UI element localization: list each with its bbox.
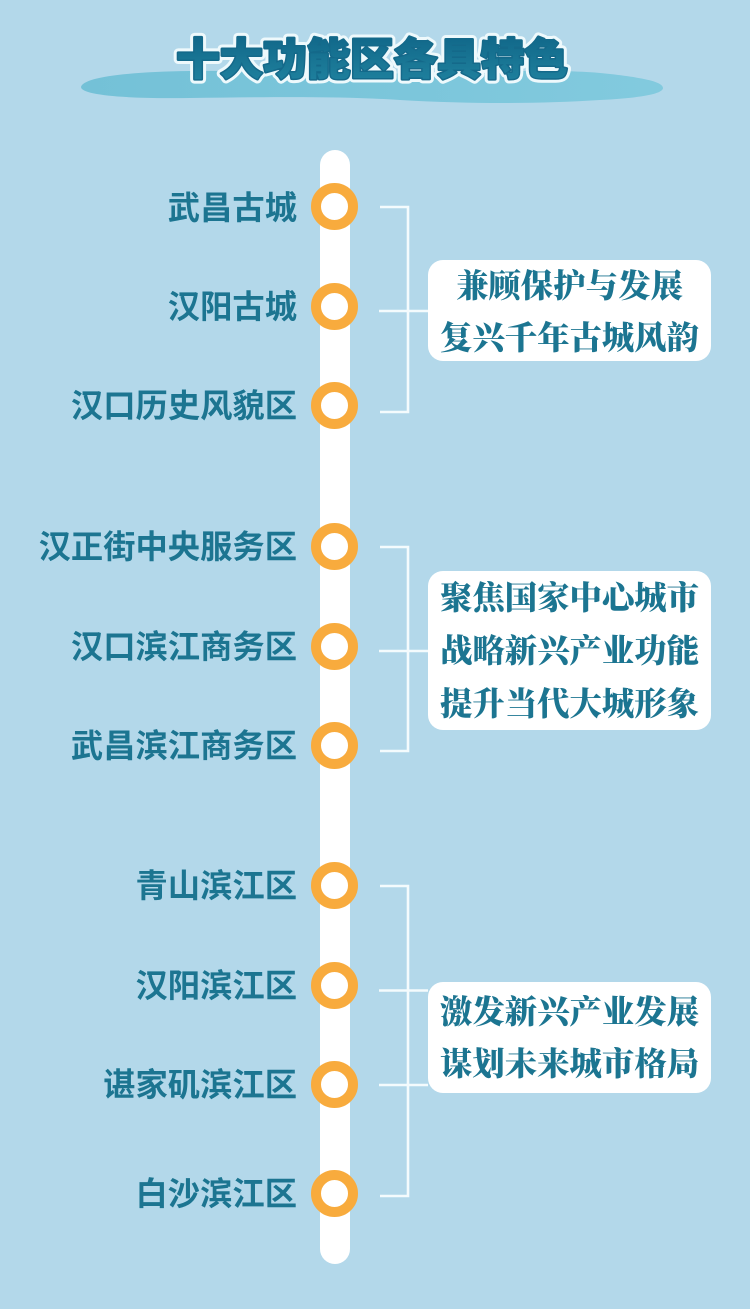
text line: 谋划未来城市格局 (440, 1047, 699, 1083)
label: 青山滨江区: 青山滨江区 (136, 868, 297, 904)
text line: 激发新兴产业发展 (440, 995, 699, 1031)
panel: riverside future (428, 982, 711, 1093)
label: 白沙滨江区: 白沙滨江区 (136, 1176, 297, 1212)
label: 武昌滨江商务区: 武昌滨江商务区 (71, 728, 297, 764)
label: 谌家矶滨江区: 谌家矶滨江区 (103, 1067, 297, 1103)
title text: 十大功能区各具特色 (176, 37, 568, 85)
wave backdrop (81, 71, 663, 103)
text line: 提升当代大城形象 (440, 687, 699, 723)
title text: 十大功能区各具特色 (176, 37, 568, 85)
panel: central business (428, 571, 711, 730)
label: 汉口历史风貌区: 汉口历史风貌区 (71, 388, 297, 424)
text line: 聚焦国家中心城市 (440, 581, 699, 617)
bracket: group 1 (379, 207, 428, 412)
text line: 兼顾保护与发展 (456, 269, 683, 305)
label: 汉正街中央服务区: 汉正街中央服务区 (39, 529, 297, 565)
label: 汉阳滨江区: 汉阳滨江区 (136, 968, 297, 1004)
panel: heritage cities (428, 260, 711, 361)
timeline bar (320, 150, 350, 1264)
label: 汉阳古城: 汉阳古城 (168, 289, 297, 325)
bracket: group 2 (379, 547, 428, 751)
label: 武昌古城: 武昌古城 (168, 190, 297, 226)
text line: 复兴千年古城风韵 (440, 321, 699, 357)
label: 汉口滨江商务区: 汉口滨江商务区 (71, 629, 297, 665)
title text: 十大功能区各具特色 (176, 37, 568, 85)
title with wave backdrop (81, 32, 663, 103)
bracket: group 3 (379, 886, 428, 1196)
text line: 战略新兴产业功能 (440, 634, 699, 670)
timeline markers (311, 183, 358, 1217)
